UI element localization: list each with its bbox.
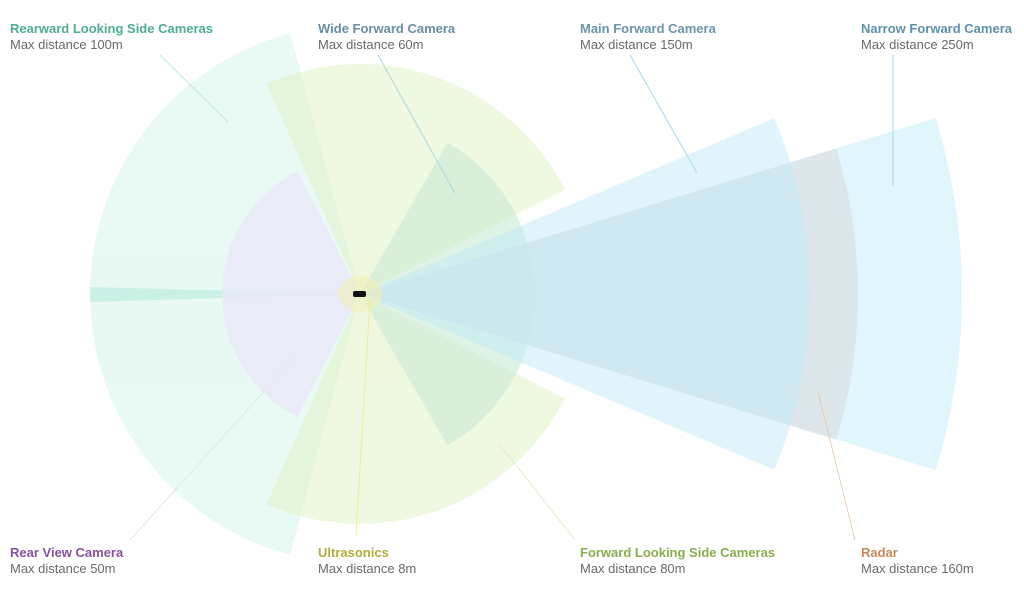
ultrasonics — [338, 276, 382, 312]
label: main forward: Max distance 150m — [580, 37, 693, 52]
leader lines — [130, 55, 893, 540]
overlap strip: rearward cameras — [90, 287, 360, 302]
sector: forward looking side cameras — [266, 64, 565, 524]
sector: narrow forward camera — [360, 118, 962, 470]
label: ultrasonics: Max distance 8m — [318, 561, 416, 576]
sector: rear view camera — [222, 171, 360, 417]
label: forward side — [580, 545, 775, 576]
label: main forward: Main Forward Camera — [580, 21, 716, 36]
label: forward side: Forward Looking Side Cameras — [580, 545, 775, 560]
label: ultrasonics: Ultrasonics — [318, 545, 389, 560]
label: rear view — [10, 545, 124, 576]
label: narrow forward: Narrow Forward Camera — [861, 21, 1012, 36]
label: rear view: Rear View Camera — [10, 545, 123, 560]
sector: main forward camera — [360, 118, 810, 470]
label: main forward — [580, 21, 716, 52]
label: rearward: Max distance 100m — [10, 37, 123, 52]
label: wide forward — [318, 21, 456, 52]
label: radar — [861, 545, 974, 576]
label: wide forward: Wide Forward Camera — [318, 21, 455, 36]
label: radar: Radar — [861, 545, 898, 560]
car — [353, 291, 366, 297]
label: rearward — [10, 21, 213, 52]
sector: radar — [360, 148, 858, 440]
label: wide forward: Max distance 60m — [318, 37, 424, 52]
label: radar: Max distance 160m — [861, 561, 974, 576]
label: narrow forward — [861, 21, 1012, 52]
sector: wide forward camera — [360, 142, 535, 446]
label: rearward: Rearward Looking Side Cameras — [10, 21, 213, 36]
sector: rearward side cameras — [90, 33, 360, 555]
label: narrow forward: Max distance 250m — [861, 37, 974, 52]
label: forward side: Max distance 80m — [580, 561, 686, 576]
label: rear view: Max distance 50m — [10, 561, 116, 576]
label: ultrasonics — [318, 545, 416, 576]
